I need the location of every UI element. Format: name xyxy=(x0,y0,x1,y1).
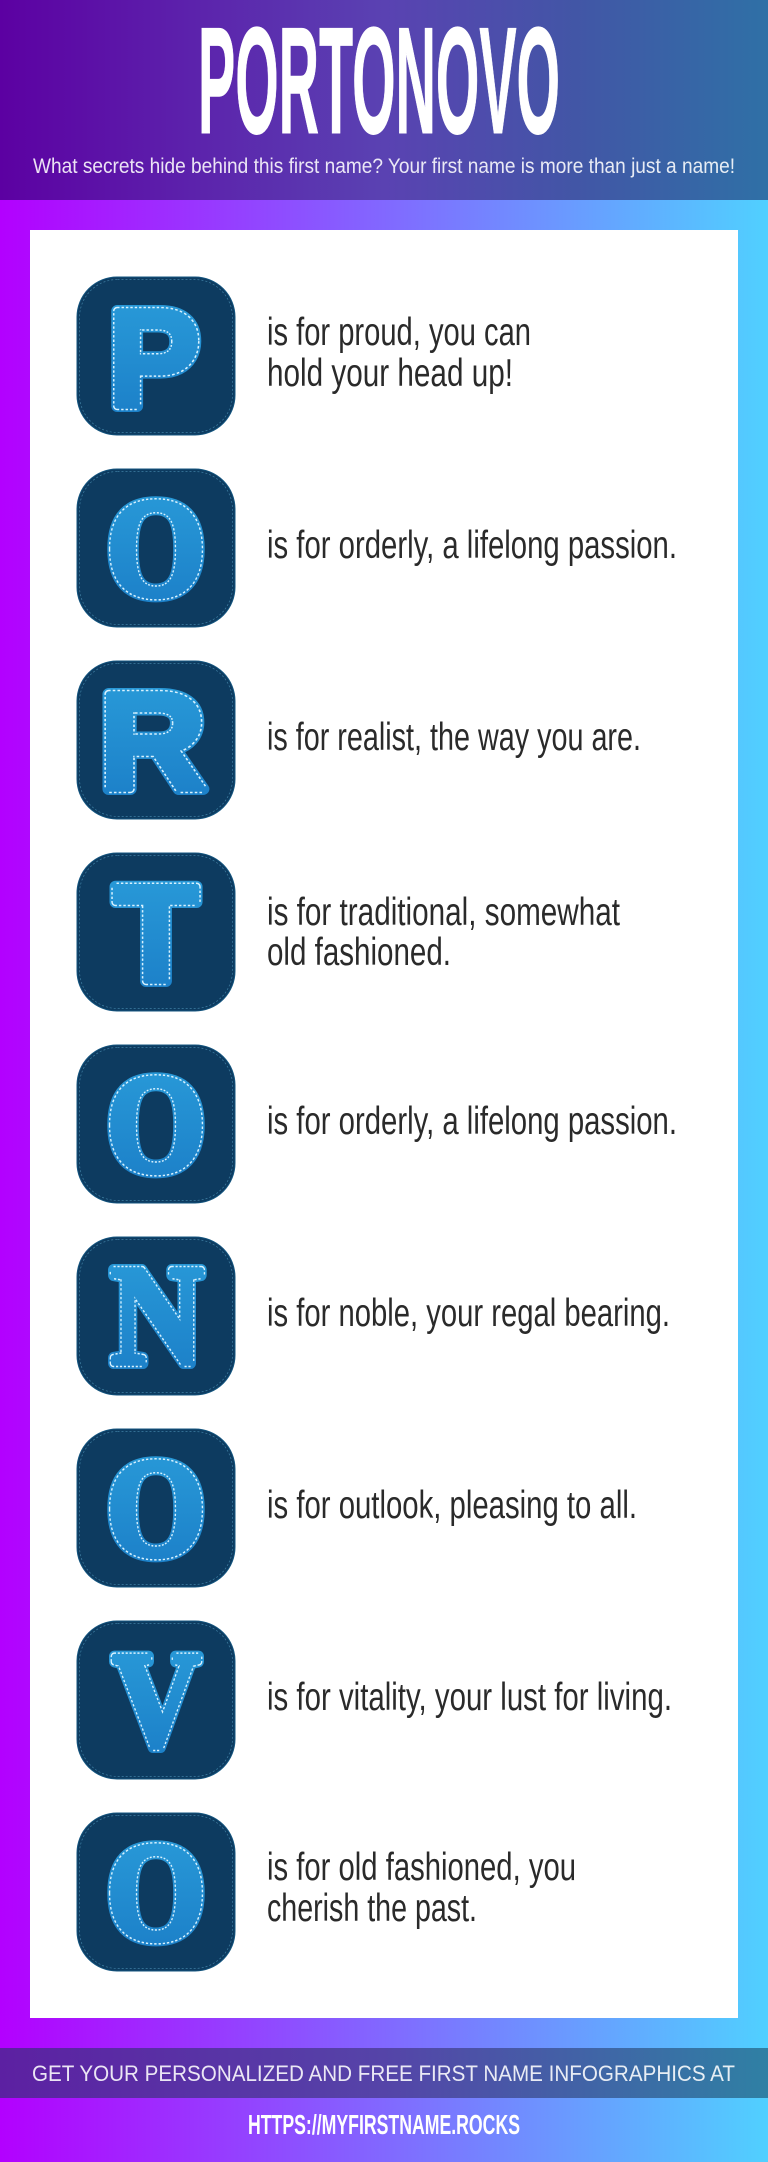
text: O line: is for outlook, pleasing to all. xyxy=(267,1484,637,1527)
icon: letter R: R xyxy=(99,665,206,819)
row: O xyxy=(77,1429,637,1587)
row: N xyxy=(77,1236,670,1395)
text: R line: is for realist, the way you are. xyxy=(267,716,641,759)
icon: letter T: T xyxy=(114,858,198,1011)
row: O xyxy=(77,1045,677,1203)
icon: letter T: T xyxy=(114,858,198,1011)
icon: letter V: V xyxy=(113,1626,200,1775)
icon: letter O: O xyxy=(106,471,206,626)
icon: letter T: T xyxy=(114,858,198,1011)
icon: letter N xyxy=(77,1236,235,1395)
icon: letter N: N xyxy=(111,1236,203,1394)
icon: letter O xyxy=(77,1429,235,1587)
icon: letter O: O xyxy=(106,1047,206,1202)
footer url: HTTPS://MYFIRSTNAME.ROCKS xyxy=(248,2109,520,2140)
text: P line: hold your head up! xyxy=(267,352,513,395)
row: O xyxy=(77,1813,576,1971)
icon: letter N: N xyxy=(111,1236,203,1394)
text: O line: is for old fashioned, you xyxy=(267,1846,576,1889)
icon: letter O: O xyxy=(106,1047,206,1202)
icon: letter O: O xyxy=(106,1815,206,1970)
icon: letter O: O xyxy=(106,1431,206,1586)
icon: letter O: O xyxy=(106,1047,206,1202)
icon: letter V xyxy=(77,1621,235,1779)
icon: letter V: V xyxy=(113,1626,200,1775)
icon: letter P xyxy=(77,277,235,436)
row: R xyxy=(77,661,641,819)
icon: letter R xyxy=(77,661,235,819)
icon: letter O xyxy=(77,469,235,627)
text: O line xyxy=(267,1846,576,1930)
panel: white letter list xyxy=(30,230,738,2018)
text: P line: is for proud, you can xyxy=(267,311,531,354)
icon: letter N: N xyxy=(111,1236,203,1394)
icon: letter O xyxy=(77,1813,235,1971)
text: T line xyxy=(267,891,620,974)
footer band xyxy=(0,2048,768,2098)
icon: letter O: O xyxy=(106,1815,206,1970)
header band xyxy=(0,0,768,200)
icon: letter R: R xyxy=(99,665,206,819)
row: O xyxy=(77,469,677,627)
row: T xyxy=(77,853,620,1011)
icon: letter P: P xyxy=(108,282,200,436)
icon: letter O: O xyxy=(106,471,206,626)
text: O line: cherish the past. xyxy=(267,1887,477,1930)
icon: letter P: P xyxy=(108,282,200,436)
icon: letter R: R xyxy=(99,665,206,819)
text: T line: old fashioned. xyxy=(267,931,451,974)
icon: letter P: P xyxy=(108,282,200,436)
icon: letter T xyxy=(77,853,235,1011)
text: P line xyxy=(267,311,531,395)
text: T line: is for traditional, somewhat xyxy=(267,891,620,934)
icon: letter O: O xyxy=(106,1815,206,1970)
row: P xyxy=(77,277,531,436)
icon: letter O: O xyxy=(106,1431,206,1586)
icon: letter V: V xyxy=(113,1626,200,1775)
icon: letter O xyxy=(77,1045,235,1203)
icon: letter O: O xyxy=(106,1431,206,1586)
icon: letter O: O xyxy=(106,471,206,626)
row: V xyxy=(77,1621,672,1779)
